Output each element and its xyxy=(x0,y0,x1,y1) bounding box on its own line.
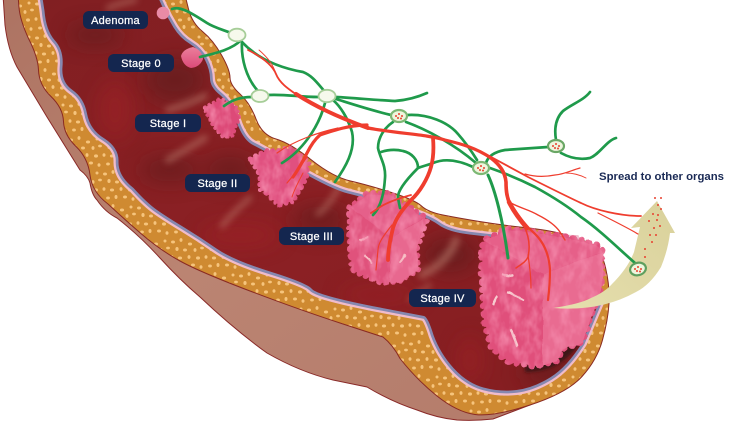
muscle layer (orange wall) xyxy=(18,0,609,415)
label: Stage 0: Stage 0 xyxy=(121,58,161,70)
lumen interior xyxy=(42,0,597,391)
label: Stage II: Stage II xyxy=(198,178,237,190)
tumor: stage I xyxy=(205,99,239,137)
lymph node E with cells xyxy=(473,162,489,174)
label: Stage I xyxy=(135,114,201,132)
lymph node D with cells xyxy=(391,110,407,122)
tumor: stage 0 xyxy=(181,47,203,68)
label: Adenoma: Adenoma xyxy=(91,15,141,27)
tumor: stage III xyxy=(349,193,426,283)
label: Stage I: Stage I xyxy=(150,118,186,130)
lymphatic vessels (green) xyxy=(172,8,635,263)
lymph node B xyxy=(252,90,268,102)
label: Spread to other organs: Spread to other organs xyxy=(599,171,724,183)
blood vessels (red) xyxy=(248,50,641,300)
label: Stage 0 xyxy=(108,54,174,72)
label: Stage II xyxy=(185,174,250,192)
label: Stage III: Stage III xyxy=(290,231,333,243)
tumor: adenoma xyxy=(157,7,169,19)
inner lining: pink layer xyxy=(42,0,600,391)
tumor: stage II xyxy=(250,149,309,205)
lymph node C xyxy=(318,90,336,102)
lymph node G with cells xyxy=(629,261,647,277)
label: Stage IV: Stage IV xyxy=(420,293,465,305)
lymph node A xyxy=(228,29,246,41)
tumor cells in arrow xyxy=(644,197,662,258)
tumor: stage IV xyxy=(481,229,604,366)
label: Stage III xyxy=(279,227,344,245)
lymph node F with cells xyxy=(548,140,564,152)
tumors by stage xyxy=(157,7,604,366)
label: Stage IV xyxy=(409,289,476,307)
guide arrow: spread to other organs xyxy=(553,197,675,309)
inner lining: purple layer xyxy=(42,0,600,391)
label: Adenoma xyxy=(83,11,148,29)
outer colon wall xyxy=(3,0,530,420)
